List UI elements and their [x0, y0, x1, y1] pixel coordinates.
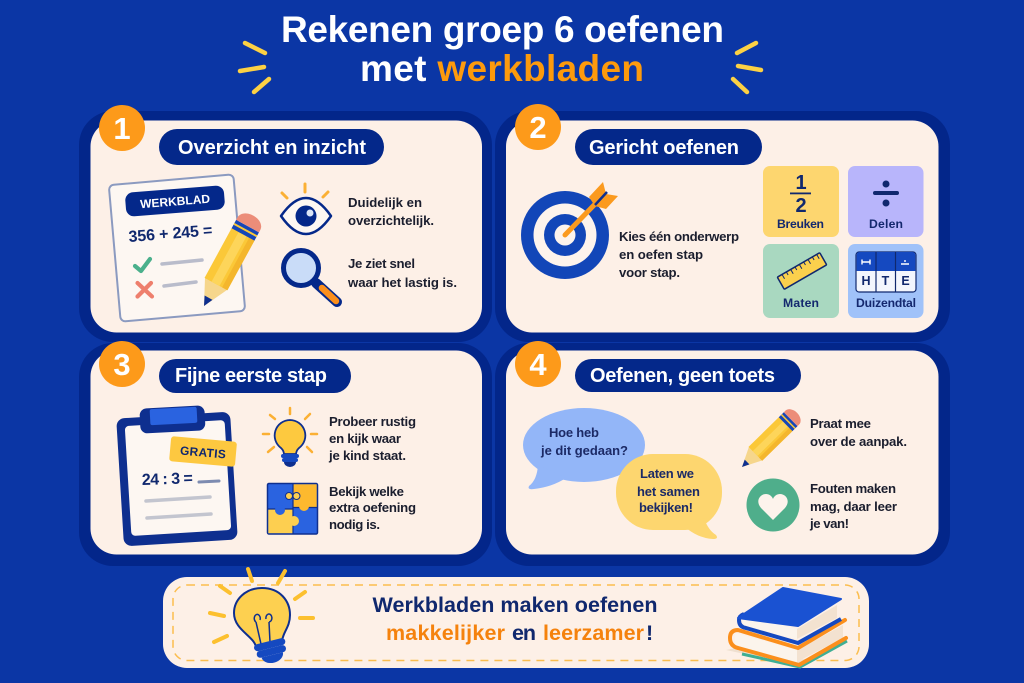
worksheet	[109, 174, 245, 322]
banner	[163, 569, 869, 668]
badge 4: 4	[529, 347, 547, 382]
heading 3: Fijne eerste stap	[175, 365, 327, 387]
text: fouten maken: je van!	[809, 516, 849, 531]
heading 2: Gericht oefenen	[589, 137, 739, 159]
text: bekijk welke	[329, 484, 416, 532]
speech bubble blue	[523, 408, 645, 489]
text: probeer rustig	[328, 414, 416, 463]
check and cross	[135, 259, 202, 296]
tile: duizendtal: H	[861, 274, 871, 288]
icon: puzzle	[268, 484, 318, 534]
icon: light bulb	[263, 408, 317, 467]
tile: delen	[848, 166, 924, 237]
text: kies een onderwerp: voor stap.	[619, 265, 680, 280]
banner text: Werkbladen maken oefenen	[372, 593, 658, 617]
worksheet label: WERKBLAD	[140, 192, 211, 211]
icon: magnifier	[284, 250, 337, 302]
text: je ziet snel: waar het lastig is.	[347, 275, 457, 290]
title: met werkbladen	[360, 48, 644, 89]
tile: delen: Delen	[869, 217, 903, 231]
badge 1: 1	[113, 111, 131, 146]
badge 4	[515, 341, 561, 387]
text: je ziet snel: Je ziet snel	[348, 256, 415, 271]
text: duidelijk: Duidelijk en	[348, 195, 422, 210]
icon: title sparkles left	[240, 43, 269, 92]
text: probeer rustig: je kind staat.	[328, 448, 406, 463]
heading 3	[159, 359, 351, 393]
text: praat mee: over de aanpak.	[810, 434, 907, 449]
text: kies een onderwerp: en oefen stap	[619, 247, 703, 262]
sum: 24 : 3 =	[142, 470, 193, 489]
icon: pencil	[735, 406, 804, 474]
text: praat mee	[810, 416, 907, 449]
gratis tag: GRATIS	[179, 444, 226, 461]
icon: books	[726, 588, 847, 667]
text: bekijk welke: nodig is.	[329, 517, 380, 532]
panel 3: fijne eerste stap	[79, 341, 492, 566]
banner text	[372, 593, 658, 645]
tile: maten	[763, 244, 839, 318]
text: fouten maken: mag, daar leer	[810, 499, 897, 514]
text: probeer rustig: Probeer rustig	[329, 414, 416, 429]
icon: eye	[281, 184, 331, 234]
panel 1: overzicht en inzicht	[79, 105, 492, 342]
tile: duizendtal: E	[901, 274, 910, 288]
icon: title sparkles right	[733, 43, 761, 92]
banner text: !	[646, 621, 653, 645]
title: Rekenen groep 6 oefenen	[281, 9, 724, 50]
tile: duizendtal: Duizendtal	[856, 296, 916, 310]
tile: breuken	[763, 166, 839, 237]
tile: maten: Maten	[783, 296, 819, 310]
text: praat mee: Praat mee	[810, 416, 871, 431]
icon: pencil	[193, 209, 265, 312]
gratis tag	[169, 436, 237, 467]
heading 1: Overzicht en inzicht	[178, 137, 366, 159]
worksheet lines	[146, 497, 211, 518]
icon: clipboard	[116, 405, 238, 546]
tile: breuken: Breuken	[777, 217, 824, 231]
tile: breuken: 2	[795, 195, 807, 217]
tile: duizendtal	[848, 244, 924, 318]
badge 3	[99, 341, 145, 387]
text: kies een onderwerp	[619, 229, 739, 280]
icon: big light bulb	[210, 569, 313, 666]
heading 4: Oefenen, geen toets	[590, 365, 775, 387]
text: fouten maken: Fouten maken	[810, 481, 896, 496]
sum: 356 + 245 =	[128, 222, 213, 246]
speech bubble yellow: bekijken!	[639, 500, 693, 515]
text: fouten maken	[809, 481, 897, 531]
icon: heart	[746, 478, 800, 532]
badge 1	[99, 105, 145, 151]
text: duidelijk	[348, 195, 434, 228]
speech bubble blue: Hoe heb	[549, 425, 599, 440]
badge 3: 3	[113, 347, 131, 382]
badge 2	[515, 104, 561, 150]
heading 2	[575, 129, 762, 165]
speech bubble yellow	[616, 454, 722, 539]
text: duidelijk: overzichtelijk.	[348, 213, 434, 228]
text: bekijk welke: extra oefening	[329, 500, 416, 515]
speech bubble yellow: Laten we	[640, 466, 694, 481]
speech bubble yellow: het samen	[637, 484, 700, 499]
text: kies een onderwerp: Kies één onderwerp	[619, 229, 739, 244]
title	[281, 9, 724, 89]
answer lines	[199, 481, 219, 482]
panel 4: oefenen, geen toets	[495, 341, 950, 566]
badge 2: 2	[529, 110, 547, 145]
icon: target with arrow	[521, 182, 618, 279]
heading 1	[159, 129, 384, 165]
tile: duizendtal: T	[882, 274, 890, 288]
banner text: leerzamer	[543, 621, 645, 645]
banner text: en	[512, 621, 536, 645]
heading 4	[575, 359, 801, 392]
text: je ziet snel	[347, 256, 457, 290]
speech bubble blue: je dit gedaan?	[540, 443, 628, 458]
worksheet label	[125, 185, 225, 217]
panel 2: gericht oefenen	[495, 104, 950, 342]
text: probeer rustig: en kijk waar	[329, 431, 401, 446]
text: bekijk welke: Bekijk welke	[329, 484, 404, 499]
banner text: makkelijker	[386, 621, 506, 645]
tile: breuken: 1	[795, 172, 807, 194]
